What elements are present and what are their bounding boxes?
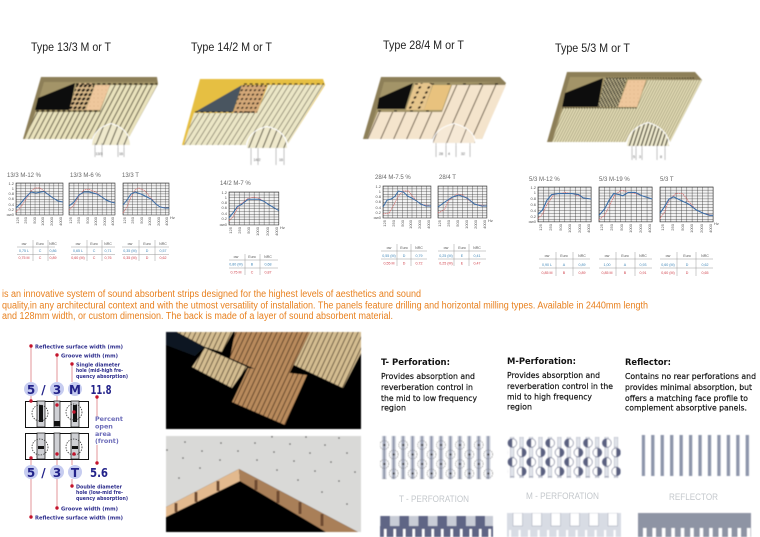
- table: 13/3 T: 0,35 (M): [123, 256, 137, 260]
- table: 5/3 M-12: [539, 252, 590, 276]
- chart: 13/3 M-12 %: 500: [32, 216, 37, 224]
- table: 5/3 T: D: [686, 263, 689, 267]
- chart: 5/3 M-12 %: 125: [538, 223, 543, 231]
- table: 13/3 M-12: NRC: [49, 242, 57, 246]
- table: 13/3 M-6: 0,60 (M): [71, 256, 85, 260]
- table: 13/3 T: 0,57: [160, 249, 166, 253]
- diagram: perforation key: open: [95, 422, 113, 430]
- section bottom: [26, 433, 88, 460]
- table: 13/3 M-6: 0,71: [104, 249, 112, 253]
- chart: 14/2 M-7 %: 0.4: [221, 211, 228, 216]
- chart: 13/3 T: 125: [122, 216, 127, 224]
- panel illustration: 13/3: [23, 77, 158, 157]
- diagram: perforation key: M: [69, 383, 81, 397]
- chart: 13/3 T: [122, 173, 175, 226]
- chart: 13/3 T: 4000: [164, 216, 169, 226]
- table: 13/3 M-6: 0,65 L: [73, 249, 83, 253]
- chart: 13/3 M-12 %: 1000: [40, 216, 45, 226]
- chart: 5/3 M-12 %: [529, 177, 591, 233]
- table: 13/3 T: 0,35 (M): [123, 249, 137, 253]
- chart: 13/3 M-12 %: 250: [23, 216, 28, 224]
- chart: 28/4 M-7.5 %: 0.2: [375, 210, 382, 215]
- table: 13/3 M-12: C: [39, 256, 42, 260]
- table: 5/3 M-12: αw: [545, 254, 550, 258]
- table: 28/4 T: 0,25 (M): [439, 262, 453, 266]
- text block: T-Perforation: the mid to low frequency: [381, 394, 478, 403]
- text block: Reflector: offers a matching face profile to: [625, 394, 748, 403]
- description text: [2, 289, 648, 322]
- table: 13/3 M-6: Euro: [90, 242, 98, 246]
- chart: 28/4 M-7.5 %: 1: [379, 189, 382, 194]
- diagram: perforation key: /: [41, 383, 46, 397]
- table: 5/3 M-19: 0,93: [640, 263, 646, 267]
- chart: 5/3 T: 1000: [689, 223, 694, 233]
- text block: T-Perforation: [381, 358, 478, 412]
- heading: Type 5/3: Type 5/3 M or T: [555, 43, 630, 55]
- chart: 13/3 M-6 %: 500: [85, 216, 90, 224]
- panel illustration: 14/2: 16: [279, 158, 283, 162]
- table: 5/3 T: 0,65: [702, 271, 708, 275]
- chart: 28/4 T: 125: [437, 219, 442, 227]
- chart: 5/3 M-19 %: 125: [599, 223, 604, 231]
- chart: 28/4 T: [437, 175, 493, 229]
- chart: 28/4 M-7.5 %: 0.6: [375, 199, 382, 204]
- table: 13/3 M-12: 0,75 M: [18, 256, 30, 260]
- diagram: perforation key: hole (low-mid fre-: [76, 490, 123, 496]
- table: 28/4 T: [438, 244, 486, 266]
- text block: M-Perforation: mid to high frequency: [507, 392, 593, 402]
- table: 13/3 M-6: 0,76: [104, 256, 112, 260]
- pattern: reflector: [642, 435, 754, 476]
- table: 13/3 M-6: [71, 240, 115, 261]
- chart: 5/3 M-12 %: 500: [558, 223, 563, 231]
- chart: 13/3 M-6 %: 2000: [102, 216, 107, 226]
- diagram: perforation key: Single diameter: [76, 362, 120, 368]
- chart: 5/3 M-19 %: 1000: [628, 223, 633, 233]
- table: 14/2 M-7: B: [251, 262, 254, 266]
- chart: 28/4 M-7.5 %: 2000: [417, 219, 422, 229]
- panel illustration: 28/4: 4: [448, 152, 450, 156]
- table: 14/2 M-7: NRC: [264, 255, 272, 259]
- chart: 5/3 T: 250: [670, 223, 675, 231]
- chart: 5/3 M-12 %: 250: [548, 223, 553, 231]
- table: 28/4 T: 0,41: [474, 254, 480, 258]
- chart: 13/3 M-12 %: 4000: [58, 216, 63, 226]
- panel illustration: 14/2: 14/2: [254, 158, 260, 162]
- chart: 28/4 M-7.5 %: 0.4: [375, 205, 382, 210]
- chart: 28/4 M-7.5 %: 1000: [408, 219, 413, 229]
- chart: 13/3 M-12 %: 0.6: [8, 196, 15, 201]
- chart: 5/3 T: 125: [660, 223, 665, 231]
- photo: micro-perforated panel: [166, 436, 361, 532]
- description text: quality,in any architectural context and with the utmost versatility of installation. The panels feature drilling and horizontal milling types. Available in 2440mm length: [2, 300, 648, 312]
- table: 5/3 T: 0,62: [702, 263, 708, 267]
- diagram: perforation key: area: [95, 430, 111, 438]
- chart: 5/3 M-19 %: 5/3 M-19 %: [599, 177, 630, 183]
- diagram: perforation key: Groove width (mm): [61, 354, 118, 360]
- table: 5/3 M-12: NRC: [578, 254, 586, 258]
- chart: 13/3 M-6 %: 13/3 M-6 %: [70, 173, 101, 179]
- diagram: perforation key: T: [71, 466, 80, 480]
- chart: 5/3 M-19 %: 500: [619, 223, 624, 231]
- chart: 5/3 M-19 %: 2000: [638, 223, 643, 233]
- chart: 14/2 M-7 %: [220, 181, 285, 236]
- table: 13/3 M-12: αw: [22, 242, 27, 246]
- chart: 28/4 T: 250: [446, 219, 451, 227]
- text block: T-Perforation: region: [381, 404, 406, 412]
- diagram: perforation key: Percent: [95, 415, 123, 423]
- diagram: perforation key: [24, 344, 128, 522]
- chart: 14/2 M-7 %: 250: [237, 226, 242, 234]
- chart: 13/3 M-12 %: 0.2: [8, 207, 15, 212]
- chart: 14/2 M-7 %: 1000: [255, 226, 260, 236]
- chart: 5/3 T: 500: [680, 223, 685, 231]
- table: 5/3 M-19: 1,00: [604, 263, 610, 267]
- chart: 28/4 T: 2000: [473, 219, 478, 229]
- description text: and 128mm width, or custom dimension. The back is made of a layer of sound absorbent material.: [2, 311, 393, 322]
- diagram: perforation key: quency absorption): [76, 496, 128, 502]
- chart: 5/3 T: 2000: [699, 223, 704, 233]
- diagram: perforation key: 5: [27, 383, 35, 397]
- diagram: perforation key: 5.6: [90, 466, 108, 480]
- chart: 28/4 T: 4000: [482, 219, 487, 229]
- panel illustration: 5/3: 8: [660, 155, 662, 159]
- chart: 14/2 M-7 %: 2000: [265, 226, 270, 236]
- text block: M-Perforation: reverberation control in the: [507, 382, 613, 391]
- table: 5/3 M-19: NRC: [639, 254, 647, 258]
- chart: 13/3 M-12 %: [7, 173, 63, 226]
- diagram: perforation key: quency absorption): [76, 374, 128, 380]
- chart: 14/2 M-7 %: 1.2: [221, 190, 228, 195]
- table: 5/3 M-12: B: [563, 271, 566, 275]
- chart: 5/3 M-19 %: 250: [609, 223, 614, 231]
- heading: Type 13/3: Type 13/3 M or T: [31, 42, 111, 54]
- table: 5/3 M-19: 0,91: [640, 271, 646, 275]
- profile: T-perforation: [380, 516, 493, 537]
- chart: 14/2 M-7 %: 4000: [274, 226, 279, 236]
- table: 13/3 M-6: αw: [76, 242, 81, 246]
- chart: 13/3 M-12 %: 0.8: [8, 191, 15, 196]
- chart: 14/2 M-7 %: 500: [246, 226, 251, 234]
- table: 13/3 M-6: C: [93, 249, 96, 253]
- profile: reflector: [638, 513, 751, 537]
- chart: 28/4 M-7.5 %: 28/4 M-7.5 %: [375, 175, 411, 181]
- diagram: perforation key: 11.8: [90, 383, 112, 397]
- chart: 13/3 T: 13/3 T: [122, 173, 139, 179]
- chart: 5/3 M-12 %: 1000: [567, 223, 572, 233]
- text block: T-Perforation: reverberation control in: [381, 383, 473, 392]
- heading: Type 28/4: Type 28/4 M or T: [383, 40, 464, 52]
- chart: 5/3 T: 5/3 T: [660, 177, 674, 183]
- table: 28/4 M-7.5: 0,72: [416, 262, 422, 266]
- chart: 13/3 T: 500: [139, 216, 144, 224]
- chart: 13/3 M-6 %: [68, 173, 115, 226]
- chart: 13/3 M-6 %: 125: [68, 216, 73, 224]
- chart: 14/2 M-7 %: 125: [228, 226, 233, 234]
- diagram: perforation key: Double diameter: [76, 484, 122, 490]
- chart: 14/2 M-7 %: αw0: [220, 222, 228, 227]
- chart: 28/4 M-7.5 %: 500: [400, 219, 405, 227]
- table: 14/2 M-7: [229, 254, 278, 275]
- table: 28/4 T: αw: [444, 246, 449, 250]
- diagram: perforation key: (front): [95, 437, 119, 445]
- table: 13/3 M-12: [17, 240, 57, 261]
- table: 14/2 M-7: 0,87: [264, 270, 272, 274]
- chart: 14/2 M-7 %: 14/2 M-7 %: [220, 181, 251, 187]
- diagram: perforation key: 3: [53, 466, 61, 480]
- chart: 28/4 M-7.5 %: αw0: [374, 215, 382, 220]
- chart: 5/3 M-12 %: 0.8: [530, 196, 537, 201]
- table: 28/4 M-7.5: D: [403, 262, 406, 266]
- chart: 13/3 T: 1000: [147, 216, 152, 226]
- chart: 14/2 M-7 %: 1: [225, 195, 228, 200]
- chart: 5/3 M-12 %: 2000: [577, 223, 582, 233]
- table: 14/2 M-7: 0,75 M: [230, 270, 242, 274]
- pattern: M-perforation: [508, 437, 621, 478]
- chart: 13/3 T: 250: [130, 216, 135, 224]
- table: 13/3 T: NRC: [159, 242, 167, 246]
- table: 5/3 M-19: Euro: [621, 254, 629, 258]
- table: 5/3 T: NRC: [701, 254, 709, 258]
- label: T-perforation: T - PERFORATION: [399, 494, 469, 505]
- chart: 5/3 T: Hz: [714, 221, 719, 226]
- table: 5/3 M-12: 0,90 L: [542, 263, 552, 267]
- table: 28/4 T: 0,47: [474, 262, 480, 266]
- table: 5/3 M-12: 0,89: [578, 263, 586, 267]
- table: 5/3 M-19: B: [624, 271, 627, 275]
- description text: is an innovative system of sound absorbent strips designed for the highest levels of aesthetics and sound: [2, 289, 421, 300]
- chart: 28/4 M-7.5 %: 125: [382, 219, 387, 227]
- chart: 14/2 M-7 %: 0.2: [221, 216, 228, 221]
- table: 5/3 M-19: [599, 252, 652, 276]
- text block: Reflector: Contains no rear perforations and: [625, 372, 756, 381]
- table: 14/2 M-7: αw: [234, 255, 239, 259]
- table: 13/3 T: Euro: [143, 242, 151, 246]
- table: 13/3 M-12: 0,86: [50, 249, 56, 253]
- chart: 5/3 M-12 %: 0.4: [530, 208, 537, 213]
- chart: 13/3 T: 2000: [156, 216, 161, 226]
- table: 13/3 T: [122, 240, 169, 261]
- text block: T-Perforation: T- Perforation:: [381, 358, 450, 368]
- profile: M-perforation: [507, 513, 621, 537]
- chart: 28/4 T: 500: [455, 219, 460, 227]
- text block: Reflector: Reflector:: [625, 358, 671, 368]
- chart: 13/3 M-6 %: 1000: [93, 216, 98, 226]
- table: 5/3 M-12: Euro: [560, 254, 568, 258]
- panel illustration: 5/3: [547, 72, 702, 160]
- table: 28/4 M-7.5: NRC: [415, 246, 423, 250]
- table: 14/2 M-7: C: [251, 270, 254, 274]
- chart: 28/4 T: Hz: [488, 218, 493, 223]
- table: 5/3 T: [660, 252, 713, 276]
- chart: 5/3 M-12 %: 1: [534, 190, 537, 195]
- diagram: perforation key: Reflective surface width (mm): [35, 344, 123, 350]
- chart: 5/3 T: [660, 177, 719, 233]
- panel illustration: 13/3: 13/3: [96, 152, 102, 156]
- table: 14/2 M-7: 0,68: [264, 262, 272, 266]
- table: 5/3 T: Euro: [683, 254, 691, 258]
- panel illustration: 28/4: 28: [439, 152, 443, 156]
- text block: M-Perforation: [507, 357, 613, 412]
- chart: 5/3 M-19 %: 4000: [647, 223, 652, 233]
- chart: 13/3 M-12 %: 125: [15, 216, 20, 224]
- chart: 13/3 M-6 %: 250: [76, 216, 81, 224]
- chart: 14/2 M-7 %: 0.8: [221, 200, 228, 205]
- table: 13/3 M-12: Euro: [36, 242, 44, 246]
- chart: 13/3 M-12 %: 13/3 M-12 %: [7, 173, 42, 179]
- diagram: perforation key: /: [41, 466, 46, 480]
- panel illustration: 28/4: 32: [461, 152, 465, 156]
- chart: 5/3 T: 4000: [708, 223, 713, 233]
- panel illustration: 28/4: [363, 77, 506, 157]
- chart: 28/4 M-7.5 %: 0.8: [375, 194, 382, 199]
- chart: 13/3 M-12 %: 1.2: [8, 181, 15, 186]
- chart: 13/3 T: Hz: [170, 215, 175, 220]
- table: 13/3 T: 0,62: [160, 256, 166, 260]
- panel illustration: 13/3: 16: [119, 152, 123, 156]
- table: 28/4 T: 0,25 (M): [439, 254, 453, 258]
- table: 13/3 M-6: NRC: [104, 242, 112, 246]
- diagram: perforation key: hole (mid-high fre-: [76, 368, 123, 374]
- diagram: perforation key: Reflective surface width (mm): [35, 516, 123, 522]
- table: 28/4 M-7.5: 0,79: [416, 254, 422, 258]
- table: 13/3 T: αw: [128, 242, 133, 246]
- panel illustration: 5/3: 3: [639, 155, 641, 159]
- table: 13/3 T: D: [146, 256, 149, 260]
- table: 28/4 T: E: [461, 254, 464, 258]
- table: 5/3 M-19: 0,85 M: [602, 271, 612, 275]
- table: 28/4 M-7.5: 0,55 (M): [382, 254, 396, 258]
- chart: 28/4 T: 28/4 T: [439, 175, 456, 181]
- chart: 28/4 M-7.5 %: 250: [391, 219, 396, 227]
- table: 13/3 M-6: C: [93, 256, 96, 260]
- table: 5/3 M-12: 0,89: [578, 271, 586, 275]
- chart: 28/4 T: 1000: [464, 219, 469, 229]
- table: 5/3 M-12: 0,85 M: [542, 271, 552, 275]
- text block: T-Perforation: Provides absorption and: [381, 372, 475, 381]
- chart: 13/3 M-12 %: 2000: [49, 216, 54, 226]
- diagram: perforation key: 3: [53, 383, 61, 397]
- table: 5/3 M-19: A: [624, 263, 627, 267]
- text block: M-Perforation: M-Perforation:: [507, 357, 576, 367]
- table: 13/3 T: D: [146, 249, 149, 253]
- chart: 28/4 M-7.5 %: 1.2: [375, 184, 382, 189]
- chart: 28/4 M-7.5 %: 4000: [426, 219, 431, 229]
- chart: 13/3 M-12 %: αw0: [7, 212, 15, 217]
- table: 28/4 M-7.5: 0,55 M: [384, 262, 394, 266]
- diagram: perforation key: Groove width (mm): [61, 506, 118, 512]
- chart: 13/3 M-12 %: 1: [12, 186, 15, 191]
- pattern: T-perforation: [380, 436, 493, 479]
- chart: 14/2 M-7 %: Hz: [280, 225, 285, 230]
- chart: 28/4 M-7.5 %: [374, 175, 431, 229]
- chart: 5/3 M-19 %: [599, 177, 652, 233]
- chart: 13/3 M-6 %: 4000: [110, 216, 115, 226]
- table: 14/2 M-7: 0,80 (M): [229, 262, 243, 266]
- table: 28/4 M-7.5: [381, 244, 427, 266]
- table: 13/3 M-12: C: [39, 249, 42, 253]
- text block: M-Perforation: region: [507, 402, 532, 412]
- diagram: perforation key: 5: [27, 466, 35, 480]
- chart: 5/3 M-12 %: 0.6: [530, 202, 537, 207]
- text block: Reflector: provides minimal absorption, but: [625, 383, 752, 392]
- table: 28/4 T: E: [461, 262, 464, 266]
- table: 13/3 M-12: 0,75 L: [19, 249, 29, 253]
- heading: Type 14/2: Type 14/2 M or T: [191, 42, 272, 54]
- chart: 5/3 M-12 %: 0.2: [530, 214, 537, 219]
- table: 28/4 T: Euro: [458, 246, 466, 250]
- photo: grooved wood panels: [166, 332, 361, 429]
- table: 5/3 T: D: [686, 271, 689, 275]
- table: 5/3 T: 0,60 (M): [661, 271, 675, 275]
- text block: M-Perforation: Provides absorption and: [507, 371, 600, 380]
- table: 28/4 M-7.5: D: [403, 254, 406, 258]
- panel illustration: 14/2: [182, 79, 325, 165]
- chart: 5/3 M-12 %: 4000: [586, 223, 591, 233]
- chart: 13/3 M-12 %: 0.4: [8, 202, 15, 207]
- label: reflector: REFLECTOR: [669, 492, 718, 503]
- table: 28/4 M-7.5: Euro: [400, 246, 408, 250]
- text block: Reflector: [625, 358, 756, 412]
- table: 28/4 T: NRC: [473, 246, 481, 250]
- panel illustration: 5/3: 5: [633, 155, 635, 159]
- table: 5/3 M-19: αw: [605, 254, 610, 258]
- text block: Reflector: complement absorptive panels.: [625, 404, 747, 412]
- table: 5/3 T: αw: [666, 254, 671, 258]
- chart: 5/3 M-12 %: 5/3 M-12 %: [529, 177, 560, 183]
- label: M-perforation: M - PERFORATION: [526, 491, 599, 502]
- table: 14/2 M-7: Euro: [248, 255, 256, 259]
- chart: 14/2 M-7 %: 0.6: [221, 205, 228, 210]
- table: 13/3 M-12: 0,89: [50, 256, 56, 260]
- chart: 5/3 M-12 %: 1.2: [530, 185, 537, 190]
- section top: [26, 401, 88, 428]
- chart: 5/3 M-12 %: αw0: [529, 219, 537, 224]
- table: 5/3 T: 0,60 (M): [661, 263, 675, 267]
- table: 28/4 M-7.5: αw: [387, 246, 392, 250]
- table: 5/3 M-12: A: [563, 263, 566, 267]
